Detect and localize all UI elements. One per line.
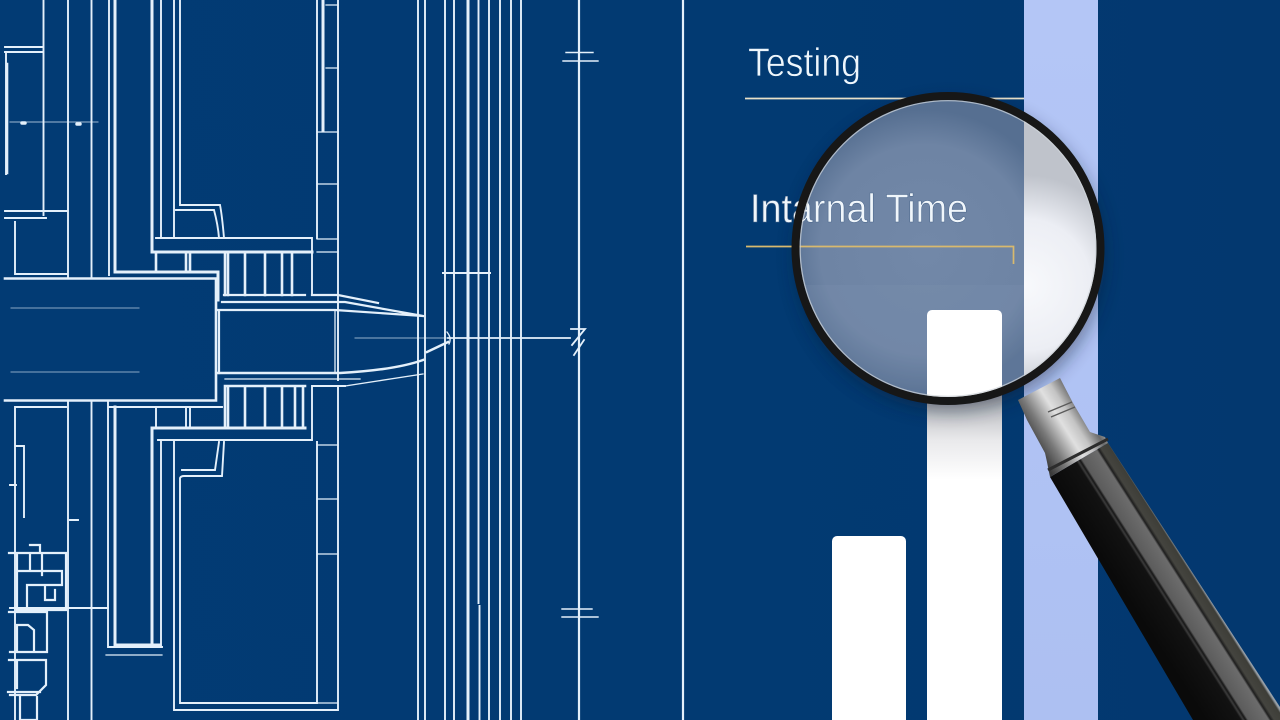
short bar	[832, 536, 906, 720]
lower mechanical section	[10, 386, 345, 720]
blueprint drawing	[5, 0, 683, 720]
lens rim	[796, 96, 1100, 401]
dimension lines	[562, 0, 683, 720]
handle grip	[1050, 443, 1280, 720]
lens shadow	[795, 101, 1105, 411]
label: Testing: Testing	[748, 41, 861, 85]
upper mechanical section	[5, 0, 425, 720]
label: Internal Time: Intarnal Time	[750, 187, 968, 231]
label: Internal Time	[746, 187, 1014, 264]
left small fittings	[8, 545, 66, 720]
tall bar	[927, 310, 1002, 720]
magnifying glass handle	[1018, 378, 1280, 720]
metal ferrule	[1018, 378, 1108, 477]
central shaft	[11, 302, 570, 386]
bar chart	[832, 310, 1002, 720]
vertical rule group	[443, 0, 521, 720]
magnifying glass lens	[800, 100, 1096, 397]
light blue column	[1024, 0, 1098, 720]
